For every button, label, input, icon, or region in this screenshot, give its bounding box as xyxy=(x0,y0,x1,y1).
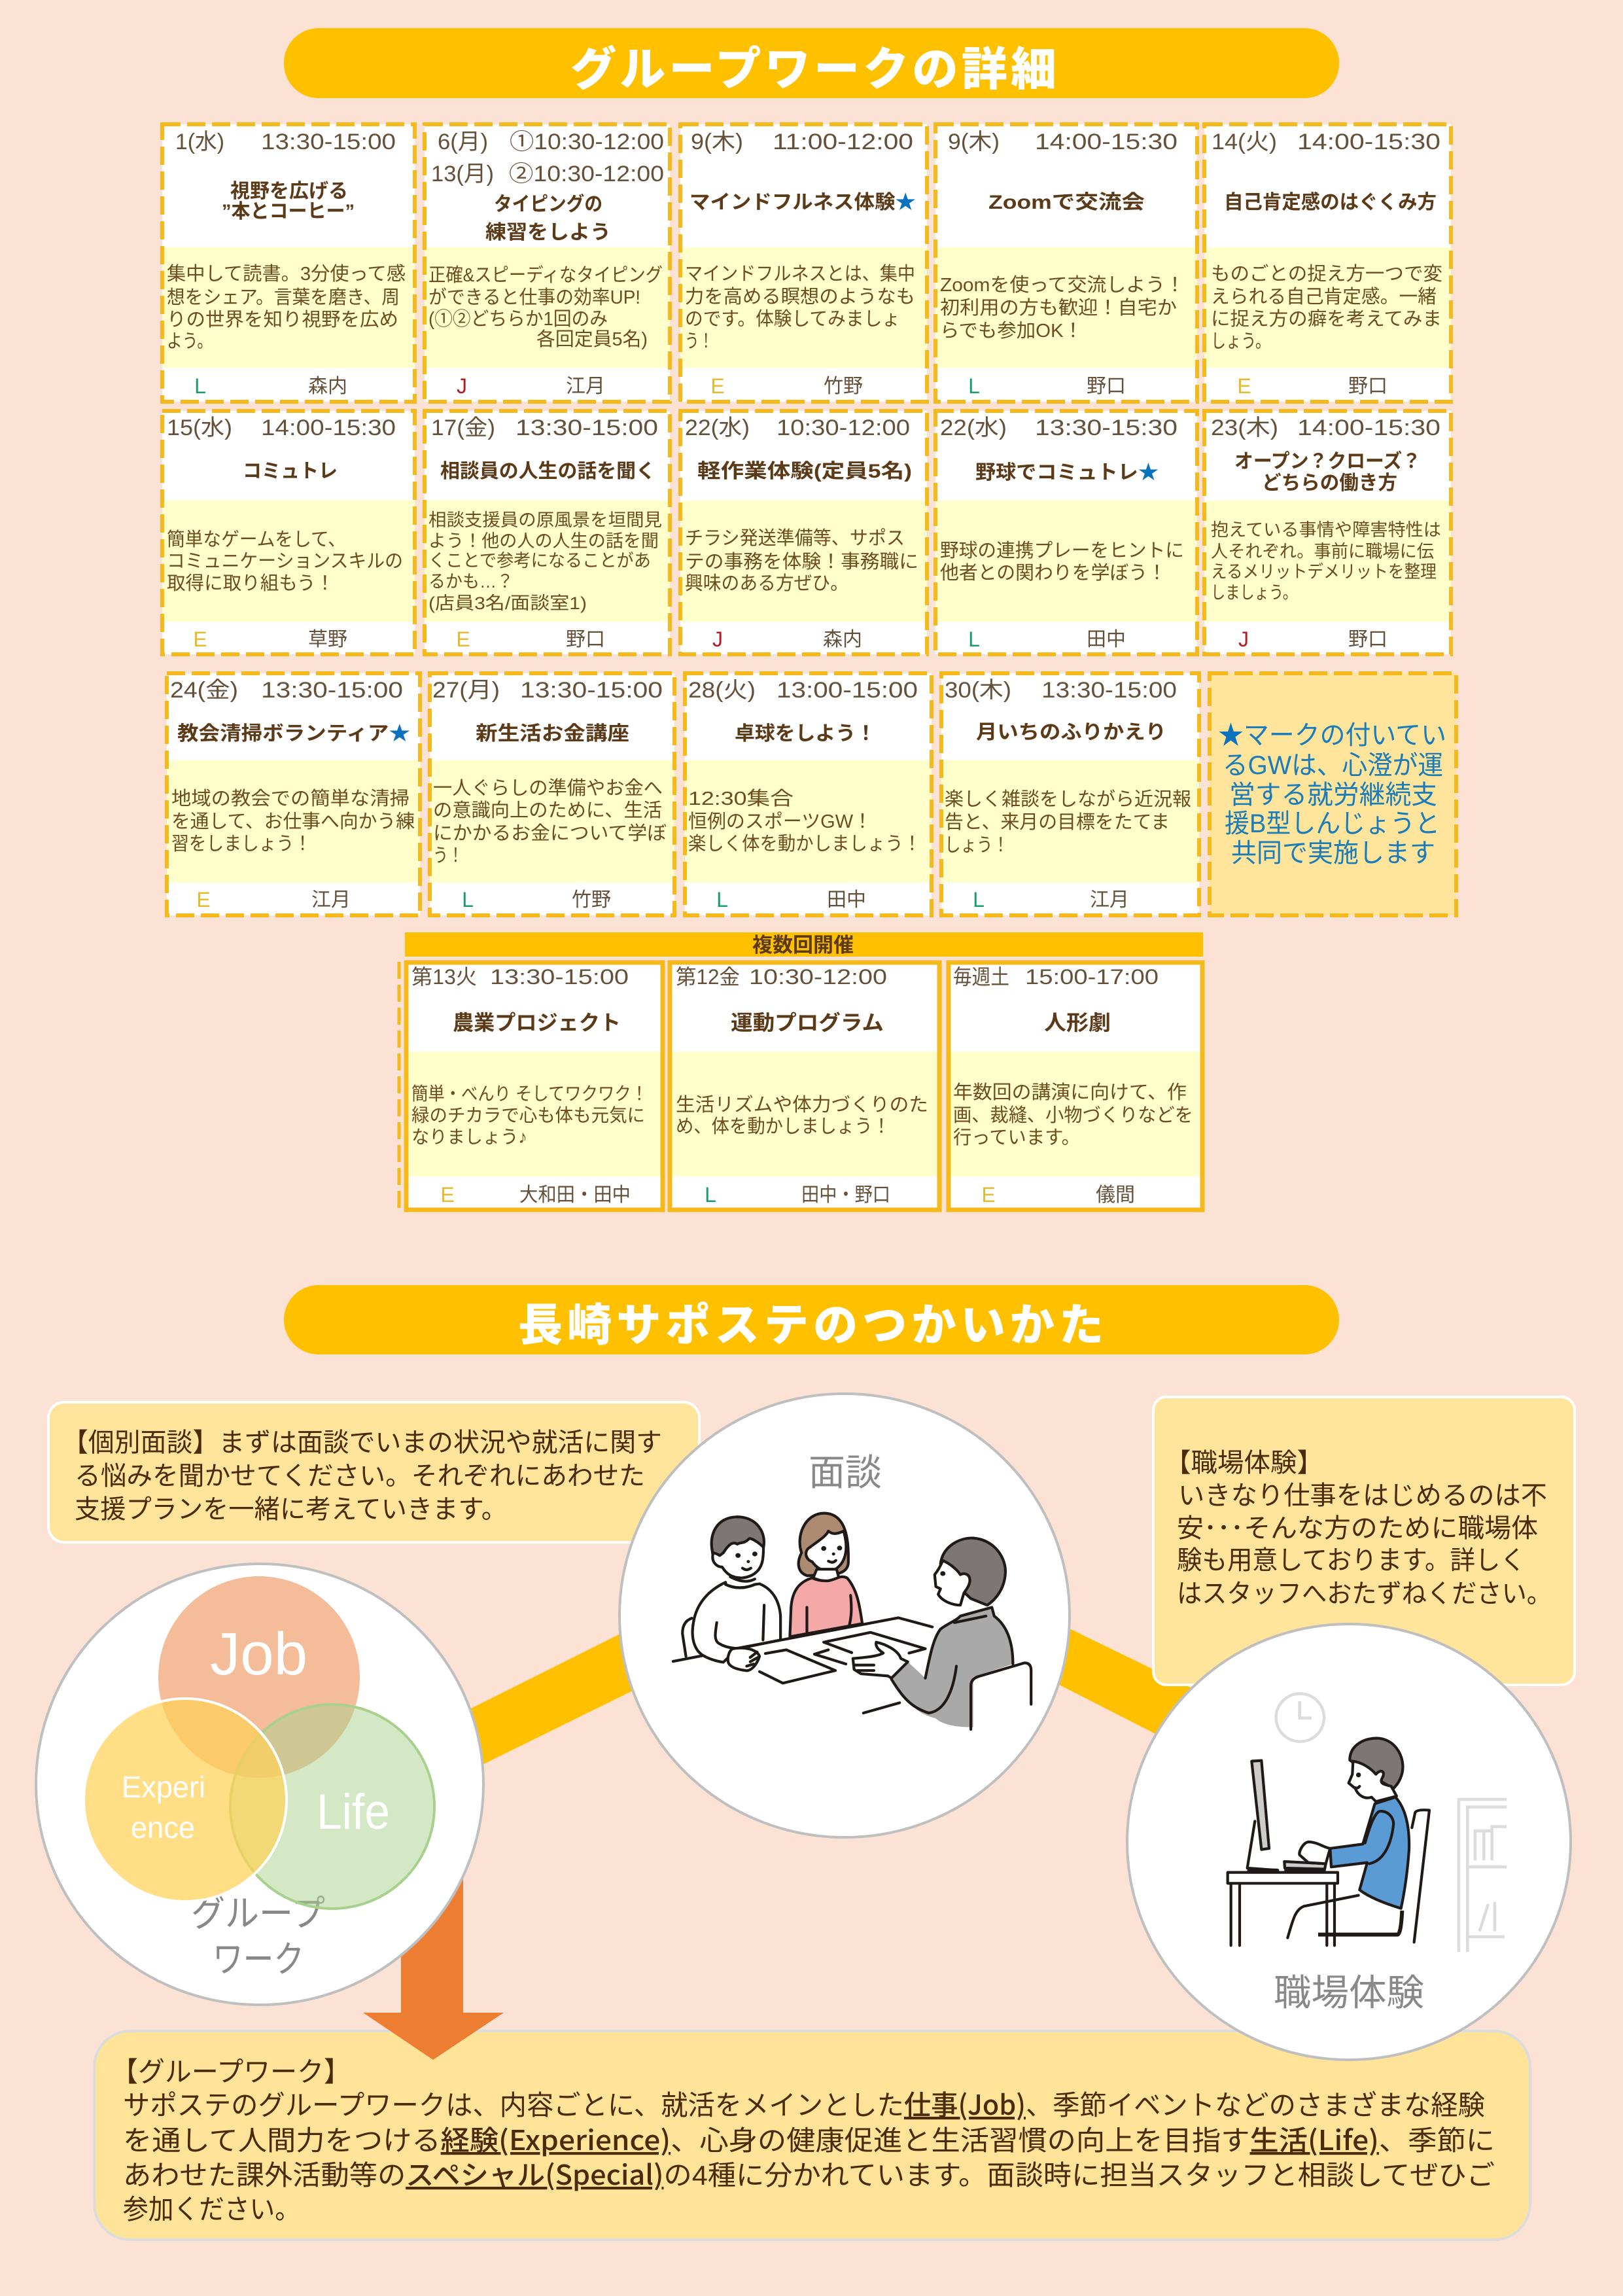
category and staff: L xyxy=(705,1183,716,1207)
callout: workplace experience: いきなり仕事をはじめるのは不 xyxy=(1178,1481,1547,1510)
venn: job circle xyxy=(158,1576,360,1778)
date and time: 10:30-12:00 xyxy=(777,415,910,440)
callout: star mark note: 共同で実施します xyxy=(1231,839,1435,868)
title: 運動プログラム xyxy=(731,1011,884,1034)
panel: card 7 counselor life story xyxy=(425,411,670,654)
venn: experience circle xyxy=(84,1699,287,1901)
icon: three people meeting at a table xyxy=(673,1513,1031,1729)
description xyxy=(411,1084,648,1147)
description: ものごとの捉え方一つで変 xyxy=(1211,263,1442,285)
description xyxy=(953,1082,1193,1148)
category and staff: 田中・野口 xyxy=(801,1184,890,1206)
arrow: connector group work to interview xyxy=(458,1617,667,1772)
date and time: 13:00-15:00 xyxy=(777,678,918,703)
panel: card 8 light work experience xyxy=(680,411,927,654)
date and time: 22(水) xyxy=(685,415,750,440)
date and time: 24(金) xyxy=(170,678,238,703)
dates and times: ①10:30-12:00 xyxy=(510,130,664,154)
category and staff: 草野 xyxy=(308,629,347,650)
title: 野球でコミュトレ ★ xyxy=(975,462,1159,484)
panel: workplace experience circle xyxy=(1127,1624,1571,2060)
panel: card 3 mindfulness xyxy=(680,124,927,402)
heading: how to use Nagasaki Saposute: 長崎サポステのつかいかた xyxy=(518,1301,1104,1351)
description: えられる自己肯定感。一緒 xyxy=(1211,286,1437,308)
description: Zoomを使って交流しよう！ xyxy=(940,274,1185,296)
category and staff: E xyxy=(1237,374,1251,398)
description xyxy=(1211,520,1441,603)
description xyxy=(167,529,403,594)
category and staff xyxy=(973,888,1129,911)
date and time: 30(木) xyxy=(945,678,1011,703)
category and staff: E xyxy=(456,627,470,651)
panel: card 1 reading and coffee xyxy=(162,124,415,402)
description: コミュニケーションスキルの xyxy=(167,551,403,572)
date and time xyxy=(685,415,910,440)
date and time: 14(火) xyxy=(1212,130,1277,154)
date and time: 27(月) xyxy=(432,678,500,703)
venn: life circle: Life xyxy=(317,1784,390,1840)
title: コミュトレ xyxy=(243,461,338,482)
date and time xyxy=(411,965,629,989)
date and time: 13:30-15:00 xyxy=(261,130,396,154)
label: workplace experience: 職場体験 xyxy=(1274,1972,1424,2013)
date and time xyxy=(167,415,396,440)
category and staff: 野口 xyxy=(1348,629,1387,650)
date and time xyxy=(940,415,1178,440)
title: 教会清掃ボランティア ★ xyxy=(177,723,410,745)
title: 卓球をしよう！ xyxy=(735,723,876,745)
panel: card 9 baseball communication xyxy=(935,411,1197,654)
description: にかかるお金について学ぼ xyxy=(433,822,667,844)
category and staff xyxy=(1237,374,1387,398)
description: 抱えている事情や障害特性は xyxy=(1211,520,1441,540)
panel: group work description xyxy=(94,2031,1530,2240)
venn: experience circle: Experi xyxy=(122,1770,205,1804)
description: 緑のチカラで心も体も元気に xyxy=(411,1105,645,1125)
category and staff xyxy=(456,627,605,651)
category and staff xyxy=(712,627,862,651)
date and time: 23(木) xyxy=(1211,415,1278,440)
description xyxy=(685,263,915,352)
panel: recurring card exercise program xyxy=(668,961,941,1212)
description: め、体を動かしましょう！ xyxy=(676,1116,890,1137)
callout: workplace experience: 【職場体験】 xyxy=(1164,1449,1323,1477)
description: 年数回の講演に向けて、作 xyxy=(953,1082,1187,1103)
description xyxy=(1211,263,1442,352)
category and staff: 野口 xyxy=(1348,376,1387,397)
date and time xyxy=(953,965,1159,989)
arrow: connector interview to workplace xyxy=(1040,1617,1243,1778)
date and time xyxy=(948,130,1178,154)
description: う！ xyxy=(685,331,713,352)
panel: card 4 zoom meetup xyxy=(935,124,1197,402)
title: 月いちのふりかえり xyxy=(976,722,1166,743)
description: 楽しく雑談をしながら近況報 xyxy=(945,788,1191,810)
callout: star mark note: ★マークの付いてい xyxy=(1218,721,1446,750)
category and staff: J xyxy=(1238,627,1249,651)
description: 各回定員5名) xyxy=(536,328,648,350)
panel: group work circle with venn diagram xyxy=(36,1564,483,2005)
category and staff xyxy=(716,888,866,911)
date and time: 15(水) xyxy=(167,415,232,440)
category and staff xyxy=(981,1183,1135,1207)
label: group work xyxy=(191,1893,325,1980)
description xyxy=(167,263,406,352)
description: よう！他の人の人生の話を聞 xyxy=(428,531,659,551)
category and staff: E xyxy=(193,627,207,651)
category and staff: E xyxy=(981,1183,996,1207)
description: (店員3名/面談室1) xyxy=(428,593,587,613)
category and staff: L xyxy=(716,888,728,911)
description: 告と、来月の目標をたてま xyxy=(945,811,1170,833)
description: う！ xyxy=(433,845,463,866)
date and time xyxy=(431,415,658,440)
category and staff: 竹野 xyxy=(572,889,611,911)
label: interview: 面談 xyxy=(809,1452,882,1493)
description: くことで参考になることがあ xyxy=(428,551,651,571)
date and time: 28(火) xyxy=(688,678,756,703)
category and staff xyxy=(462,888,611,911)
description: 集中して読書。3分使って感 xyxy=(167,263,406,285)
description: のです。体験してみましょ xyxy=(685,308,900,330)
date and time: 22(水) xyxy=(940,415,1007,440)
description: 恒例のスポーツGW！ xyxy=(688,811,872,832)
description xyxy=(688,788,921,855)
dates and times: 13(月) xyxy=(431,162,494,186)
description: るかも…？ xyxy=(428,572,514,592)
description: チラシ発送準備等、サポス xyxy=(685,527,905,549)
date and time: 1(水) xyxy=(175,130,224,154)
date and time xyxy=(1212,130,1440,154)
category and staff: E xyxy=(196,888,211,911)
venn: experience circle: ence xyxy=(131,1810,195,1845)
description: 想をシェア。言葉を磨き、周 xyxy=(167,287,400,308)
panel: card 12 money seminar xyxy=(430,673,674,915)
title: ”本とコーヒー” xyxy=(222,201,355,222)
heading: how to use Nagasaki Saposute xyxy=(284,1285,1339,1354)
description xyxy=(945,788,1191,856)
description: 画、裁縫、小物づくりなどを xyxy=(953,1104,1193,1126)
category and staff: E xyxy=(440,1183,455,1207)
dates and times: ②10:30-12:00 xyxy=(509,162,664,186)
description: テの事務を体験！事務職に xyxy=(685,551,918,573)
category and staff xyxy=(196,888,351,911)
category and staff: L xyxy=(968,627,980,651)
date and time: 13:30-15:00 xyxy=(515,415,658,440)
title: 人形劇 xyxy=(1044,1011,1111,1034)
description: なりましょう♪ xyxy=(411,1127,527,1147)
panel: card 11 church cleaning xyxy=(167,673,420,915)
description: よう。 xyxy=(167,331,213,352)
description: えるメリットデメリットを整理 xyxy=(1211,562,1437,582)
callout: workplace experience: はスタッフへおたずねください。 xyxy=(1177,1580,1552,1608)
title: 練習をしよう xyxy=(485,222,611,243)
description: 12:30集合 xyxy=(688,788,794,809)
description xyxy=(685,527,918,594)
panel: card 10 open or closed employment xyxy=(1204,411,1451,654)
description xyxy=(433,777,667,866)
description: しょう！ xyxy=(945,835,1009,856)
panel: group work description: サポステのグループワークは、内容ごとに、就活をメインとした仕事(Job)、季節イベントなどのさまざまな経験 xyxy=(123,2083,1485,2123)
description: 生活リズムや体力づくりのた xyxy=(676,1094,928,1116)
date and time: 第13火 xyxy=(411,965,477,989)
title: 軽作業体験(定員5名) xyxy=(697,461,912,482)
callout: star mark note: るGWは、心澄が運 xyxy=(1223,751,1443,780)
category and staff: 江月 xyxy=(1090,889,1129,911)
panel: card 14 monthly review xyxy=(941,673,1199,915)
description: マインドフルネスとは、集中 xyxy=(685,263,915,285)
category and staff: 野口 xyxy=(566,629,605,650)
description: 初利用の方も歓迎！自宅か xyxy=(940,297,1177,319)
description: 行っています。 xyxy=(953,1127,1080,1148)
description: 相談支援員の原風景を垣間見 xyxy=(428,510,662,530)
date and time: 11:00-12:00 xyxy=(773,130,913,154)
date and time xyxy=(1211,415,1440,440)
title: 新生活お金講座 xyxy=(476,723,629,745)
panel: recurring card puppet theater xyxy=(947,961,1204,1212)
date and time: 第12金 xyxy=(676,965,740,989)
description: 力を高める瞑想のようなも xyxy=(685,286,915,308)
category and staff xyxy=(705,1183,890,1207)
description: 簡単・べんり そしてワクワク！ xyxy=(411,1084,648,1104)
date and time: 13:30-15:00 xyxy=(1041,678,1177,703)
category and staff: L xyxy=(968,374,980,398)
callout: individual interview: 支援プランを一緒に考えていきます。 xyxy=(75,1495,507,1524)
description: らでも参加OK！ xyxy=(940,320,1083,342)
category and staff xyxy=(457,374,605,398)
category and staff: L xyxy=(194,374,206,398)
date and time xyxy=(676,965,887,989)
callout: individual interview: 【個別面談】まずは面談でいまの状況や就活に関す xyxy=(62,1428,662,1457)
category and staff xyxy=(1238,627,1387,651)
date and time xyxy=(170,678,403,703)
category and staff: L xyxy=(462,888,474,911)
category and staff: E xyxy=(710,374,725,398)
category and staff: 竹野 xyxy=(824,376,863,397)
date and time: 10:30-12:00 xyxy=(749,965,887,989)
callout: individual interview xyxy=(48,1402,699,1542)
panel: card 6 communication training xyxy=(162,411,415,654)
heading bar: multiple sessions xyxy=(405,932,1203,957)
title: オープン？クローズ？ xyxy=(1234,450,1421,472)
title: どちらの働き方 xyxy=(1262,472,1397,494)
description: を通して、お仕事へ向かう練 xyxy=(171,811,415,832)
date and time xyxy=(175,130,396,154)
description: 習をしましょう！ xyxy=(171,834,311,855)
description: 地域の教会での簡単な清掃 xyxy=(171,788,410,809)
description xyxy=(940,274,1185,342)
date and time: 14:00-15:30 xyxy=(1035,130,1178,154)
callout: star mark note xyxy=(1210,673,1456,915)
category and staff: 田中 xyxy=(1087,629,1126,650)
date and time xyxy=(432,678,663,703)
date and time xyxy=(945,678,1177,703)
description: 一人ぐらしの準備やお金へ xyxy=(433,777,663,799)
category and staff xyxy=(440,1183,631,1207)
title: 相談員の人生の話を聞く xyxy=(440,461,655,482)
category and staff: J xyxy=(712,627,723,651)
callout: workplace experience: 験も用意しております。詳しく xyxy=(1177,1546,1526,1575)
title xyxy=(485,194,611,243)
description: 取得に取り組もう！ xyxy=(167,573,334,594)
panel: group work description: を通して人間力をつける 経験(Experience) 、心身の健康促進と生活習慣の向上を目指す 生活(Life)、季節に xyxy=(123,2119,1495,2159)
title: タイピングの xyxy=(494,194,602,215)
date and time xyxy=(688,678,918,703)
panel: group work description: あわせた課外活動等の スペシャル(Special) の4種に分かれています。面談時に担当スタッフと相談してぜひご xyxy=(123,2153,1495,2193)
date and time: 13:30-15:00 xyxy=(520,678,663,703)
description xyxy=(428,264,663,350)
title: 視野を広げる xyxy=(230,181,348,202)
panel: card 2 typing practice xyxy=(425,124,670,402)
description: (①②どちらか1回のみ xyxy=(428,309,608,330)
description: の意識向上のために、生活 xyxy=(433,800,662,821)
label: group work: ワーク xyxy=(213,1939,304,1980)
description xyxy=(676,1094,928,1137)
description: 正確&スピーディなタイピング xyxy=(428,264,663,286)
date and time: 15:00-17:00 xyxy=(1025,965,1159,989)
category and staff: 野口 xyxy=(1087,376,1126,397)
date and time: 13:30-15:30 xyxy=(1035,415,1178,440)
title: 農業プロジェクト xyxy=(453,1011,621,1034)
title: マインドフルネス体験 ★ xyxy=(689,192,916,213)
category and staff: 田中 xyxy=(827,889,866,911)
dates and times: 6(月) xyxy=(438,130,488,154)
category and staff xyxy=(193,627,347,651)
label: group work: グループ xyxy=(191,1893,325,1934)
date and time: 14:00-15:30 xyxy=(1297,130,1440,154)
heading bar: multiple sessions: 複数回開催 xyxy=(752,934,854,957)
description: に捉え方の癖を考えてみま xyxy=(1211,308,1442,330)
description xyxy=(940,540,1184,584)
category and staff xyxy=(710,374,863,398)
date and time: 9(木) xyxy=(691,130,743,154)
category and staff xyxy=(968,627,1126,651)
description: りの世界を知り視野を広め xyxy=(167,309,398,330)
category and staff xyxy=(194,374,347,398)
callout: workplace experience xyxy=(1153,1397,1575,1685)
title: Zoomで交流会 xyxy=(988,192,1145,213)
description: ができると仕事の効率UP! xyxy=(428,287,640,308)
icon: person working at a computer xyxy=(1228,1693,1507,1952)
date and time: 14:00-15:30 xyxy=(1297,415,1440,440)
description xyxy=(171,788,415,855)
date and time xyxy=(691,130,913,154)
category and staff: 儀間 xyxy=(1096,1184,1135,1206)
description: 興味のある方ぜひ。 xyxy=(685,573,848,594)
panel: group work description: 【グループワーク】 xyxy=(111,2057,351,2087)
category and staff: J xyxy=(457,374,467,398)
callout: star mark note: 援B型しんじょうと xyxy=(1225,809,1440,838)
venn: job circle: Job xyxy=(210,1621,307,1687)
description xyxy=(428,510,662,613)
date and time: 毎週土 xyxy=(953,965,1009,989)
title xyxy=(222,181,355,222)
category and staff: 江月 xyxy=(311,889,351,911)
description: 楽しく体を動かしましょう！ xyxy=(688,833,921,855)
arrow: group work to description xyxy=(363,1832,504,2060)
title: 自己肯定感のはぐくみ方 xyxy=(1224,192,1437,213)
date and time: 17(金) xyxy=(431,415,495,440)
date and time: 14:00-15:30 xyxy=(261,415,396,440)
panel: group work description: 参加ください。 xyxy=(123,2194,300,2225)
category and staff: 江月 xyxy=(566,376,605,397)
heading: group work details xyxy=(284,28,1339,98)
description: しょう。 xyxy=(1211,331,1270,352)
category and staff: 森内 xyxy=(823,629,862,650)
category and staff: L xyxy=(973,888,985,911)
description: 野球の連携プレーをヒントに xyxy=(940,540,1184,561)
venn: life circle xyxy=(230,1704,434,1909)
panel: recurring card agriculture project xyxy=(399,961,665,1212)
category and staff: 大和田・田中 xyxy=(519,1184,631,1206)
category and staff xyxy=(968,374,1126,398)
date and time: 13:30-15:00 xyxy=(261,678,403,703)
description: 他者との関わりを学ぼう！ xyxy=(940,562,1166,584)
heading: group work details: グループワークの詳細 xyxy=(570,44,1056,95)
callout: workplace experience: 安･･･そんな方のために職場体 xyxy=(1177,1514,1538,1543)
description: 人それぞれ。事前に職場に伝 xyxy=(1211,542,1434,561)
panel: interview circle xyxy=(620,1394,1070,1837)
date and time: 9(木) xyxy=(948,130,1000,154)
callout: star mark note: 営する就労継続支 xyxy=(1229,781,1437,809)
panel: card 13 table tennis xyxy=(685,673,932,915)
callout: individual interview: る悩みを聞かせてください。それぞれにあわせた xyxy=(75,1462,645,1491)
date and time: 13:30-15:00 xyxy=(490,965,629,989)
title xyxy=(1234,450,1421,494)
dates and times xyxy=(431,130,664,186)
description: しましょう。 xyxy=(1211,583,1297,603)
category and staff: 森内 xyxy=(308,376,347,397)
description: 簡単なゲームをして、 xyxy=(167,529,346,550)
panel: card 5 self esteem xyxy=(1204,124,1451,402)
